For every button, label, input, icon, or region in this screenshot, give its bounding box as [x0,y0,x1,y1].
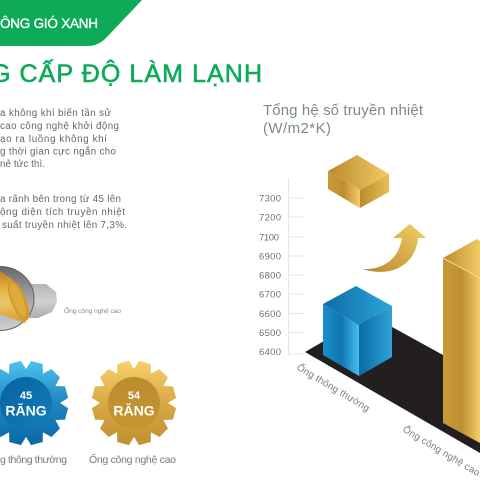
caption: pipe: Ống công nghệ cao [64,305,121,315]
gear unit: RĂNG [113,402,155,418]
text block: first paragraph [0,108,119,170]
text block: first paragraph: g thời gian cực ngắn cho [0,146,117,158]
chart: y axis: 6900 [259,252,281,262]
text block: second paragraph [0,194,127,231]
caption: gold gear: Ống công nghệ cao [89,452,176,466]
chart heading [263,102,424,137]
gear number: 54 [128,390,141,402]
x label: high-tech pipe: Ống công nghệ cao [400,423,480,479]
chart: gold bar high-tech pipe [443,239,480,443]
gear number: 45 [20,390,32,402]
text block: second paragraph: ộng diện tích truyền nhiệt [0,207,125,218]
arrow [362,224,426,272]
chart: y axis: 7300 [259,194,281,204]
icon: cutaway copper pipe [0,266,57,330]
x label: standard pipe: Ống thông thường [294,361,372,414]
chart: y axis: 6800 [259,270,281,282]
text block: first paragraph: a không khí biến tần sử [0,108,111,119]
chart heading: (W/m2*K) [263,120,331,137]
chart: y axis: 6500 [259,328,281,339]
gear unit: RĂNG [5,402,47,418]
text block: second paragraph: suất truyền nhiệt lên 7,3%. [2,220,127,231]
chart: y axis: 7200 [259,212,281,224]
chart: y axis: 7100 [259,232,279,244]
text block: first paragraph: cao công nghệ khởi động [0,121,119,132]
chart: blue bar standard pipe [323,286,392,376]
chart: y axis: 6400 [259,347,281,358]
icon: gold gear 54 teeth [90,359,178,447]
chart: y axis [259,178,304,358]
banner label: ÔNG GIÓ XANH [0,16,98,31]
text block: first paragraph: nẻ tức thì. [0,159,45,170]
top banner [0,0,142,46]
icon: blue gear 45 teeth [0,359,70,447]
text block: first paragraph: ạo ra luồng không khí [0,134,107,145]
caption: blue gear: g thông thường [0,454,67,466]
chart: y axis: 6600 [259,309,281,320]
icon: gold cube [328,155,389,208]
text block: second paragraph: a rãnh bên trong từ 45 lên [0,194,121,205]
chart: floor [305,315,480,453]
chart: y axis: 6700 [259,290,281,300]
chart heading: Tổng hệ số truyền nhiệt [263,102,424,119]
